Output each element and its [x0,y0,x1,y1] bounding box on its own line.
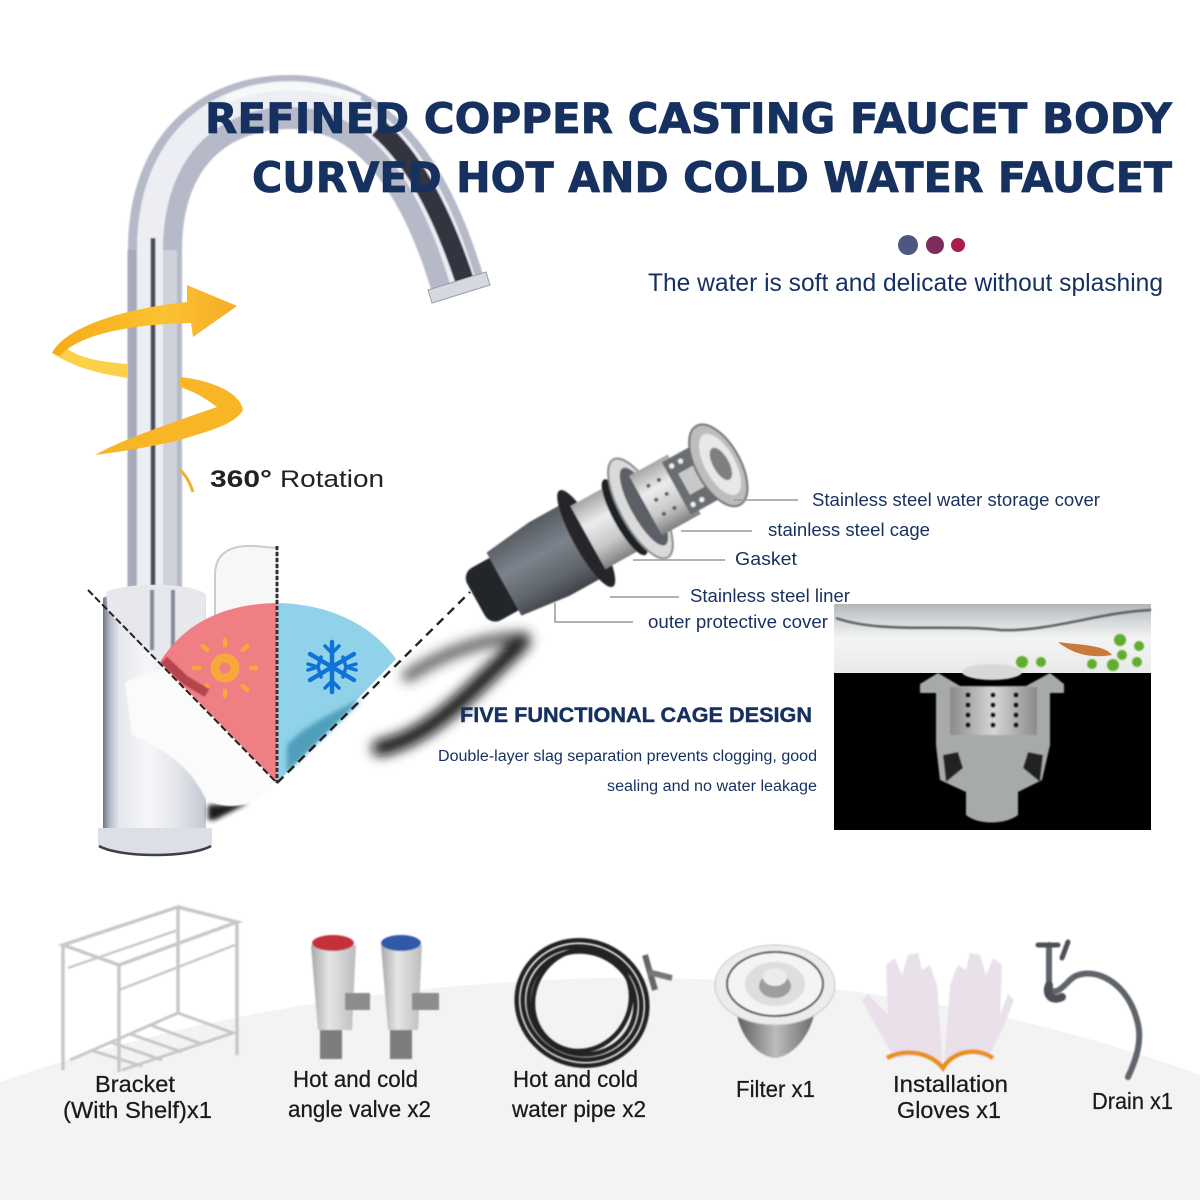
grey outer cover [484,503,605,621]
cold zone [277,603,396,783]
black end [461,553,527,626]
item: filter [715,945,835,1058]
accessory labels: (With Shelf)x1 [63,1097,212,1123]
lever shadow on base [208,803,248,820]
icon: sun [194,640,256,696]
spout tip [428,272,490,303]
drain part labels: outer protective cover [648,612,828,632]
accessory labels: Hot and cold [293,1066,418,1092]
black flange [548,484,624,593]
liner [571,485,644,569]
cage design description: sealing and no water leakage [607,778,817,795]
accessory labels: Bracket [95,1071,176,1097]
base dark edge [99,846,211,855]
cold valve [381,935,439,1059]
drain leader lines [555,500,798,622]
item: water pipe coil [496,919,672,1087]
strainer cage [950,687,1037,735]
item: gloves [862,953,1014,1068]
arrow lower band [95,377,243,455]
dashed guide lines [88,590,277,783]
food bits [1016,634,1144,671]
icon: snowflake [308,642,356,692]
black seals [943,752,963,782]
right glove [944,953,1014,1065]
accessory labels: water pipe x2 [511,1096,646,1122]
title [205,94,1173,202]
top cover [677,415,759,515]
drain part labels [648,490,1100,632]
white lever handle [125,668,277,806]
hot zone [160,603,277,783]
cold zone shadow [287,700,362,772]
subtitle: The water is soft and delicate without splashing [648,269,1163,297]
accessory labels [63,1066,1173,1123]
colour dots [898,235,965,255]
accessory labels: angle valve x2 [288,1096,431,1122]
faucet body [103,589,206,830]
panel: drain cross-section photo [834,604,1151,830]
accessory labels: Filter x1 [736,1076,815,1102]
cage dark end [662,447,719,515]
accessory labels: Gloves x1 [897,1097,1001,1123]
left glove [862,953,943,1065]
temperature sector [88,546,470,806]
cage holes [965,692,1019,728]
rotation label: Rotation [280,466,384,493]
cage design description [438,748,817,795]
lever joint [164,660,207,693]
gasket [594,474,655,560]
arrow small tail [180,470,193,492]
steel cage [629,455,701,535]
item: bracket [63,907,237,1072]
base ring [98,828,212,855]
drain assembly exploded view [449,406,765,649]
drain part labels: stainless steel cage [768,520,930,540]
faucet [98,86,490,855]
flange [920,673,1064,822]
top water rim [962,664,1022,680]
accessory labels: Installation [893,1071,1008,1097]
handle ghost outline [215,546,277,640]
drain part labels: Gasket [735,549,797,569]
title line 1: REFINED COPPER CASTING FAUCET BODY [205,94,1173,143]
accessory labels: Hot and cold [513,1066,638,1092]
arrow upper band [52,285,237,356]
background: light grey floor [0,978,1200,1200]
drain part labels: Stainless steel liner [690,586,850,606]
black background [834,604,1151,830]
cage design heading: FIVE FUNCTIONAL CAGE DESIGN [460,704,812,727]
drain cross-section [920,664,1064,822]
hot valve [311,935,370,1059]
lower steel ring [596,450,685,567]
cage design description: Double-layer slag separation prevents clogging, good [438,748,817,765]
title line 2: CURVED HOT AND COLD WATER FAUCET [252,153,1172,202]
accessory labels: Drain x1 [1092,1088,1173,1114]
collar [106,585,206,665]
item: angle valves [311,935,439,1059]
shrimp [1058,642,1112,656]
blurred hose shadow [380,638,525,748]
rotation label: 360° [210,466,272,493]
arrow back sweep [52,348,128,378]
rotation label [210,466,384,493]
drain part labels: Stainless steel water storage cover [812,490,1100,510]
faucet gooseneck pipe [132,86,466,600]
item: drain pipe [1038,942,1139,1077]
water [834,604,1151,673]
icon: rotation arrow [52,285,243,492]
glove cuffs [887,1052,993,1068]
